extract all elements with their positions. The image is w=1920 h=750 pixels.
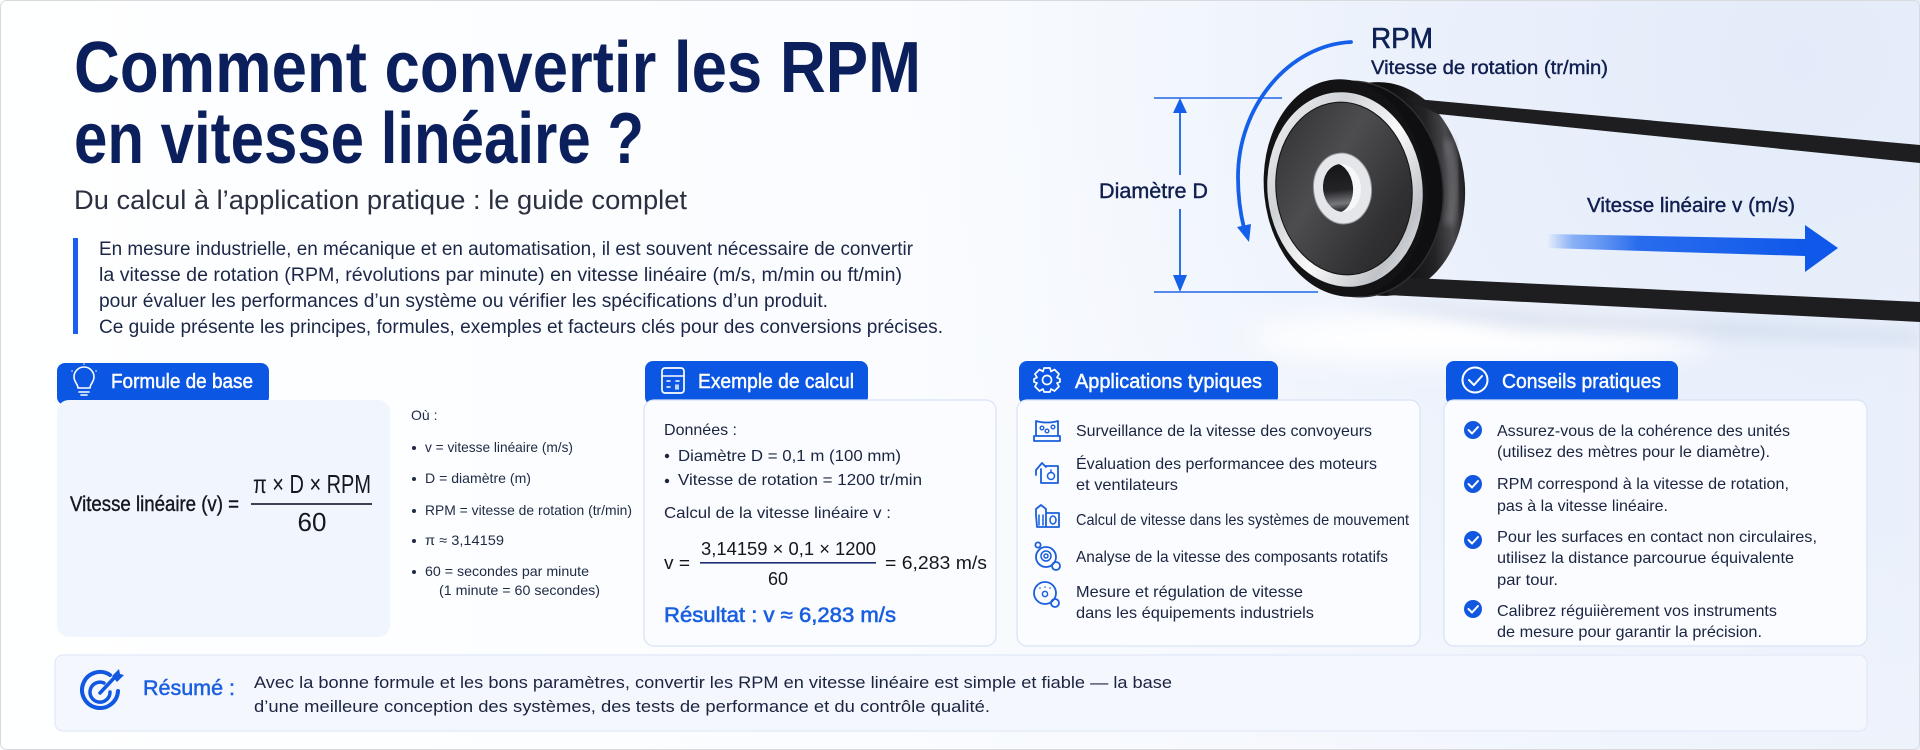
icon: light bulb	[72, 364, 96, 395]
icon: check circle	[1462, 368, 1488, 392]
summary text: d’une meilleure conception des systèmes, des tests de performance et du contrôle qualité.	[254, 697, 990, 716]
title: Comment convertir les RPM	[74, 28, 921, 108]
summary text: Avec la bonne formule et les bons paramètres, convertir les RPM en vitesse linéaire est simple et fiable — la base	[254, 673, 1172, 692]
tip 4	[1464, 600, 1777, 641]
tip 3	[1464, 529, 1817, 589]
list item: moteurs: Évaluation des performancee des moteurs	[1076, 454, 1377, 473]
title	[74, 28, 921, 179]
panel: résumé: Résumé :	[143, 677, 235, 700]
tip 3: utilisez la distance parcourue équivalente	[1497, 550, 1794, 567]
tip 1: Assurez-vous de la cohérence des unités	[1497, 423, 1790, 440]
RPM rotation arrow	[1237, 42, 1351, 242]
tip 2: RPM correspond à la vitesse de rotation,	[1497, 476, 1789, 493]
tip 3: Pour les surfaces en contact non circulaires,	[1497, 529, 1817, 546]
intro text block: En mesure industrielle, en mécanique et en automatisation, il est souvent nécessaire de convertir	[99, 239, 914, 260]
formula: 60	[298, 507, 326, 537]
tip 2: pas à la vitesse linéaire.	[1497, 498, 1668, 515]
list item: mouvement	[1036, 505, 1410, 529]
given data: Données :	[664, 422, 737, 439]
given data	[664, 422, 922, 522]
worked equation: v =	[664, 553, 690, 573]
tip 4: de mesure pour garantir la précision.	[1497, 624, 1762, 641]
list item: composants rotatifs: Analyse de la vitesse des composants rotatifs	[1076, 549, 1388, 566]
RPM label: RPM	[1371, 23, 1433, 55]
icon: gear	[1034, 368, 1060, 392]
linear speed arrow	[1547, 195, 1838, 272]
RPM label	[1371, 23, 1608, 79]
list item: régulation: dans les équipements industriels	[1076, 605, 1314, 622]
intro text block: la vitesse de rotation (RPM, révolutions par minute) en vitesse linéaire (m/s, m/min ou ft/min)	[99, 265, 902, 286]
summary text	[254, 673, 1172, 716]
variable legend: D = diamètre (m)	[425, 470, 531, 486]
panel: résumé	[55, 655, 1867, 731]
list item: moteurs	[1036, 454, 1377, 494]
tip 2	[1464, 475, 1789, 515]
panel: conseils pratiques	[1444, 361, 1867, 646]
tip 3: par tour.	[1497, 572, 1558, 589]
list item: convoyeurs: Surveillance de la vitesse des convoyeurs	[1076, 423, 1372, 440]
panel: formule de base	[57, 363, 632, 637]
RPM label: Vitesse de rotation (tr/min)	[1371, 58, 1608, 79]
panel: conseils pratiques: Conseils pratiques	[1502, 371, 1661, 393]
panel: exemple de calcul: Exemple de calcul	[698, 371, 854, 393]
list item: régulation	[1034, 582, 1314, 622]
list item: moteurs: et ventilateurs	[1076, 477, 1178, 494]
variable legend: π ≈ 3,14159	[425, 532, 504, 548]
diameter dimension	[1099, 98, 1318, 292]
worked equation: 3,14159 × 0,1 × 1200	[701, 539, 876, 559]
variable legend: v = vitesse linéaire (m/s)	[425, 439, 573, 455]
pulley and belt illustration	[1250, 71, 1920, 364]
tip 1: (utilisez des mètres pour le diamètre).	[1497, 444, 1770, 461]
worked equation: 60	[768, 569, 788, 589]
given data: Calcul de la vitesse linéaire v :	[664, 505, 891, 522]
tip 1	[1464, 421, 1790, 461]
given data: Diamètre D = 0,1 m (100 mm)	[678, 448, 901, 465]
panel: applications typiques	[1017, 361, 1420, 646]
icon: calculator	[662, 368, 684, 393]
list item: composants rotatifs	[1035, 542, 1388, 570]
list item: mouvement: Calcul de vitesse dans les systèmes de mouvement	[1076, 512, 1410, 529]
panel: exemple de calcul	[644, 361, 996, 646]
given data: Vitesse de rotation = 1200 tr/min	[678, 472, 922, 489]
variable legend: 60 = secondes par minute	[425, 563, 589, 579]
formula: Vitesse linéaire (v) =	[70, 493, 239, 516]
intro text block: Ce guide présente les principes, formules, exemples et facteurs clés pour des conversions précises.	[99, 317, 943, 338]
linear speed arrow: Vitesse linéaire v (m/s)	[1587, 195, 1795, 217]
variable legend: RPM = vitesse de rotation (tr/min)	[425, 502, 632, 518]
panel: applications typiques: Applications typiques	[1075, 371, 1262, 393]
variable legend: (1 minute = 60 secondes)	[439, 582, 600, 598]
intro text block: pour évaluer les performances d’un système ou vérifier les spécifications d’un produit.	[99, 291, 828, 312]
icon: target	[82, 669, 124, 708]
worked equation: = 6,283 m/s	[885, 553, 987, 573]
worked equation	[664, 539, 987, 589]
title: en vitesse linéaire ?	[74, 99, 644, 179]
formula	[70, 469, 372, 537]
result: Résultat : v ≈ 6,283 m/s	[664, 604, 896, 627]
tip 4: Calibrez réguiièrement vos instruments	[1497, 603, 1777, 620]
subtitle: Du calcul à l’application pratique : le guide complet	[74, 185, 687, 215]
variable legend: Où :	[411, 407, 437, 423]
diameter dimension: Diamètre D	[1099, 180, 1208, 203]
list item: régulation: Mesure et régulation de vitesse	[1076, 584, 1303, 601]
variable legend	[411, 407, 632, 598]
panel: formule de base: Formule de base	[111, 371, 253, 393]
intro text block	[73, 238, 943, 338]
formula: π × D × RPM	[253, 469, 371, 499]
